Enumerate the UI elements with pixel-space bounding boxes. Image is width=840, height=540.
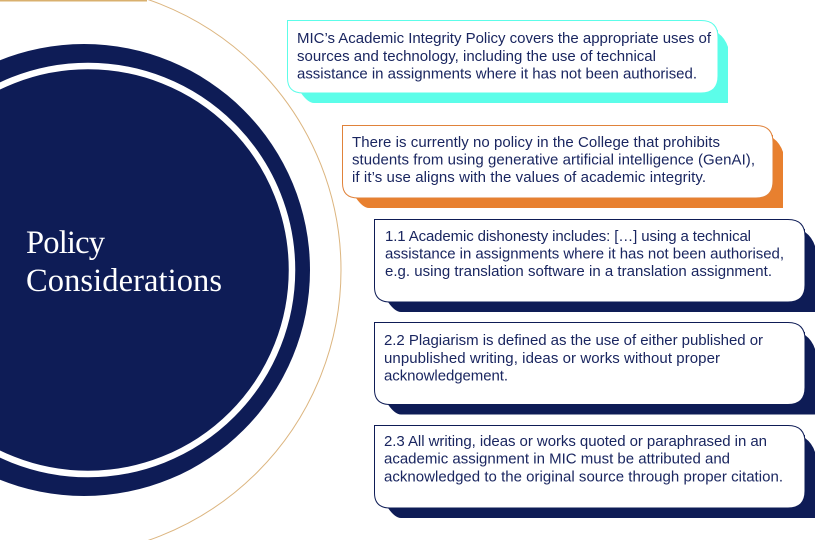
panel text: [297, 30, 712, 82]
panel text: 2.3 All writing, ideas or works quoted or paraphrased in an: [384, 433, 767, 450]
panel text: acknowledged to the original source through proper citation.: [384, 468, 783, 486]
panel box: [374, 220, 805, 302]
panel text: students from using generative artificial intelligence (GenAI),: [352, 152, 755, 168]
panel shadow: [387, 332, 815, 414]
panel text: [384, 433, 783, 486]
panel: clause 2.3: [374, 426, 815, 518]
panel shadow: [387, 229, 815, 312]
panel shadow: [300, 30, 728, 103]
panel box: [342, 126, 773, 198]
panel text: sources and technology, including the use of technical: [297, 48, 656, 65]
panel text: assistance in assignments where it has not been authorised.: [297, 66, 697, 82]
panel shadow: [387, 435, 815, 518]
panel text: MIC’s Academic Integrity Policy covers the appropriate uses of: [297, 30, 712, 47]
panel text: if it’s use aligns with the values of academic integrity.: [352, 169, 706, 186]
panel box: [374, 322, 805, 404]
panel: academic integrity policy (cyan): [288, 20, 728, 103]
panel text: [385, 228, 784, 280]
panel text: academic assignment in MIC must be attributed and: [384, 450, 730, 468]
panel: clause 2.2: [374, 322, 815, 414]
panel: clause 1.1: [374, 220, 815, 312]
panel text: [352, 134, 755, 186]
title: Policy Considerations: Policy: [26, 225, 106, 261]
panel box: [374, 426, 805, 508]
panel: no GenAI prohibition (orange): [342, 126, 783, 208]
panel text: unpublished writing, ideas or works without proper: [384, 350, 720, 367]
panel text: assistance in assignments where it has not been authorised,: [385, 246, 784, 262]
panel text: e.g. using translation software in a translation assignment.: [385, 263, 772, 280]
panel text: acknowledgement.: [384, 368, 508, 384]
navy circle with white ring: [0, 44, 310, 496]
panel box: [288, 20, 718, 93]
title: Policy Considerations: Considerations: [26, 263, 222, 299]
panel text: 2.2 Plagiarism is defined as the use of either published or: [384, 332, 763, 349]
gold outer circle arc: [0, 0, 341, 540]
panel text: [384, 332, 763, 384]
panel shadow: [355, 135, 783, 208]
panel text: 1.1 Academic dishonesty includes: […] using a technical: [385, 228, 751, 245]
panel text: There is currently no policy in the College that prohibits: [352, 134, 720, 151]
title: Policy Considerations: [26, 225, 222, 299]
